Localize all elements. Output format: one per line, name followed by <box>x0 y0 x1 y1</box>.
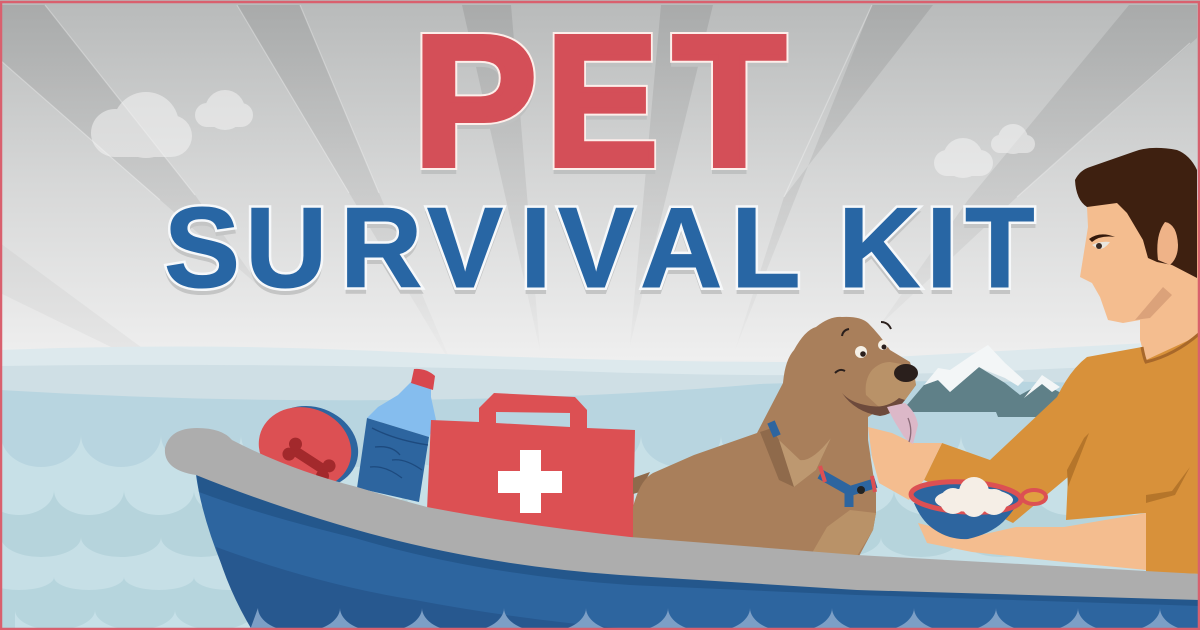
title: PET: T <box>673 0 785 205</box>
boat: lower hull shade <box>216 547 640 630</box>
title: PET <box>413 0 785 210</box>
sky background <box>0 0 1200 360</box>
dog: tail <box>633 472 650 494</box>
man: bowl-holding forearm <box>918 513 1146 570</box>
cloud: large left <box>91 92 192 158</box>
dog: body and head <box>633 317 916 560</box>
title: SURVIVAL KIT: SURVIVALKIT <box>164 185 1035 312</box>
title: SURVIVAL KIT: SURVIVALKIT <box>164 185 1035 312</box>
buoy <box>247 393 370 502</box>
dog: harness <box>771 422 876 507</box>
water bottle <box>357 369 436 502</box>
bowl: rim <box>910 479 1022 515</box>
man: shirt torso and sleeve <box>924 335 1200 574</box>
clouds <box>91 90 1035 178</box>
dog: muzzle <box>866 362 916 407</box>
man: eye <box>1089 234 1115 249</box>
bowl of food <box>910 477 1046 539</box>
title: PET: P <box>413 3 537 210</box>
man: shirt folds <box>1067 433 1190 503</box>
man: neck and face <box>1080 195 1200 362</box>
title: PET: E <box>546 2 658 210</box>
title: PET: P <box>413 0 537 205</box>
boat: hull <box>196 475 1200 630</box>
cloud: small left <box>195 90 253 130</box>
dog: eyebrows <box>835 322 891 373</box>
dog <box>633 317 918 560</box>
title: PET: E <box>546 0 658 205</box>
bowl: handle <box>1022 490 1046 504</box>
cloud: small right <box>991 124 1035 154</box>
title: PET: P <box>413 0 537 205</box>
boat <box>165 428 1200 630</box>
bowl: body <box>914 500 1020 539</box>
waves <box>0 435 1200 630</box>
mountains <box>907 345 1065 417</box>
man: neck shadow <box>1135 287 1172 320</box>
bowl: food <box>935 477 1013 517</box>
boat: dark stripe under rim <box>196 470 1200 606</box>
man: feeding forearm <box>868 427 942 500</box>
man: hair <box>1075 148 1197 278</box>
dog: ear <box>760 428 831 487</box>
boat: grey rim <box>165 428 1200 600</box>
cloud: large right <box>934 138 993 178</box>
dog: chest <box>812 510 876 556</box>
dog: mouth <box>842 393 905 416</box>
man: ear <box>1157 222 1178 265</box>
boat: water scallops <box>250 608 1200 630</box>
title: SURVIVAL KIT: SURVIVALKIT <box>164 190 1035 317</box>
gear <box>247 369 635 540</box>
icon: white cross <box>498 450 562 513</box>
dog: tongue <box>887 403 918 444</box>
sun rays <box>0 5 1197 367</box>
title: PET: T <box>673 0 785 205</box>
dog: nose <box>894 364 918 382</box>
title: PET: E <box>546 0 658 205</box>
title: PET: T <box>673 2 785 210</box>
man <box>868 148 1200 574</box>
first aid kit <box>427 393 635 540</box>
sea <box>0 340 1200 630</box>
dog: eyes <box>855 340 888 358</box>
icon: bone <box>280 435 338 485</box>
man: shirt collar <box>1142 333 1200 362</box>
